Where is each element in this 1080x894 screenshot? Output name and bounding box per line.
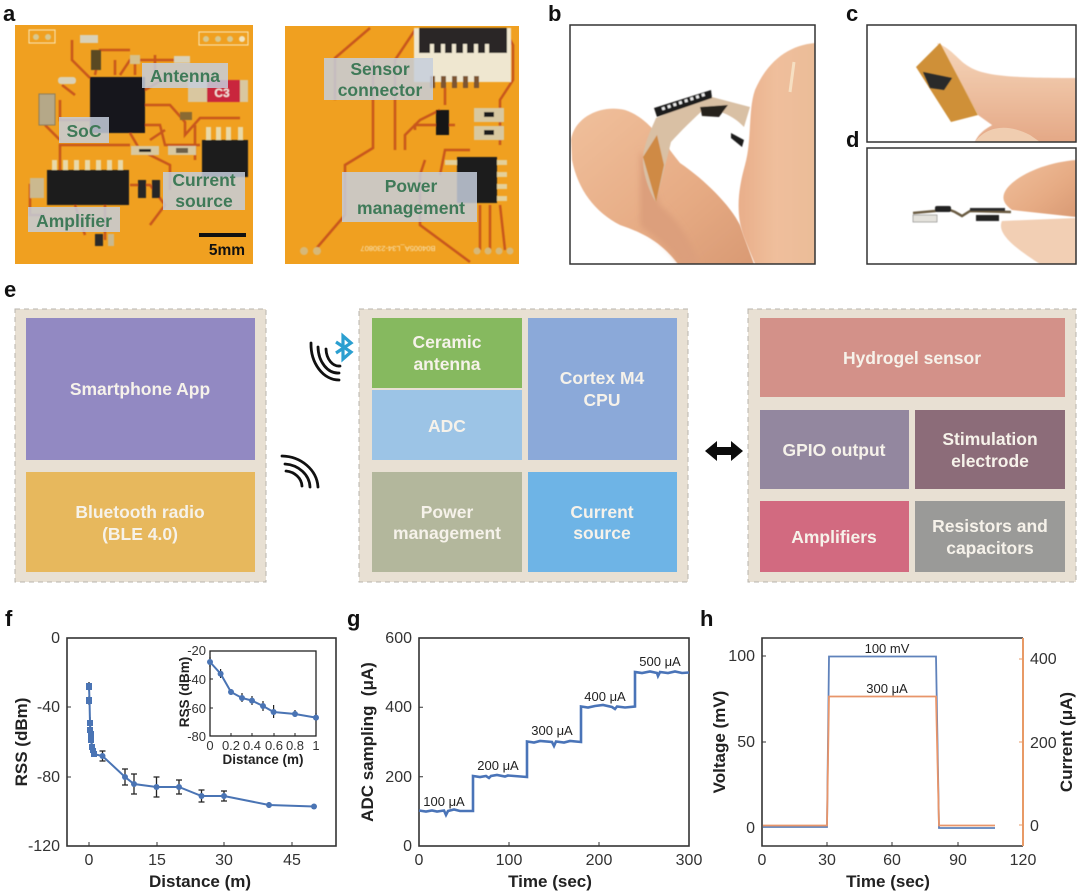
scale bar: 5mm (209, 242, 245, 259)
label: Current source: Current (172, 170, 236, 190)
box: Resistors and capacitors: capacitors (946, 538, 1034, 558)
chart h: voltage and current pulse: Time (sec) (846, 872, 930, 891)
chart h: voltage and current pulse: 120 (1010, 852, 1036, 869)
box: Ceramic antenna (372, 318, 522, 388)
chart h: voltage and current pulse: 50 (737, 734, 755, 751)
panel label h: h (700, 606, 713, 631)
box: GPIO output (760, 410, 909, 489)
label: Amplifier (28, 207, 120, 232)
chart g: ADC sampling steps: 200 (586, 852, 612, 869)
data line (89, 686, 314, 806)
icon: wireless arcs right (311, 343, 340, 380)
box: Amplifiers: Amplifiers (791, 527, 877, 547)
inset chart: RSS 0 to 1 m: 0.8 (286, 738, 304, 753)
chart f: RSS vs distance: 30 (215, 852, 233, 869)
chart g: ADC sampling steps: 0 (403, 838, 412, 855)
label: SoC: SoC (66, 121, 102, 141)
box: Bluetooth radio: Bluetooth radio (75, 502, 205, 522)
box: Current source: source (573, 523, 631, 543)
panel d: side view of circuit between fingers (867, 148, 1076, 264)
box: ADC: ADC (428, 416, 466, 436)
inset chart: RSS 0 to 1 m: Distance (m) (222, 752, 304, 767)
inset chart: RSS 0 to 1 m: -80 (187, 729, 206, 744)
inset chart: RSS 0 to 1 m: 0.4 (243, 738, 261, 753)
box: Resistors and capacitors: Resistors and (932, 516, 1048, 536)
inset chart: RSS 0 to 1 m: 0.2 (222, 738, 240, 753)
panel label d: d (846, 127, 859, 152)
box: Stimulation electrode (915, 410, 1065, 489)
block: sensor side (748, 309, 1076, 582)
chart h: voltage and current pulse: 0 (746, 820, 755, 837)
inset chart: RSS 0 to 1 m: 1 (312, 738, 320, 753)
panel a: circuit board front (15, 25, 253, 264)
label: Antenna (142, 63, 228, 88)
inset chart: RSS 0 to 1 m: -40 (187, 672, 206, 687)
chart h: voltage and current pulse: Voltage (mV) (710, 691, 729, 793)
label: Sensor connector: connector (338, 80, 422, 100)
panel a: circuit board back (285, 26, 519, 264)
chart f: RSS vs distance: 15 (148, 852, 166, 869)
chart f: RSS vs distance: 0 (51, 630, 60, 647)
panel label b: b (548, 1, 561, 26)
label: Current source: source (175, 191, 233, 211)
chart h: voltage and current pulse: 200 (1030, 735, 1057, 752)
error bars (89, 682, 269, 808)
box: Cortex M4 CPU: CPU (584, 390, 620, 410)
chart g: ADC sampling steps: 300 (676, 852, 702, 869)
chart g: ADC sampling steps: 200 (385, 769, 412, 786)
label: Antenna: Antenna (150, 66, 220, 86)
inset chart: RSS 0 to 1 m: -60 (187, 701, 206, 716)
chart g: ADC sampling steps: 400 (385, 699, 412, 716)
chart f: RSS vs distance: -80 (37, 769, 60, 786)
panel b: photo of bent circuit between fingers (570, 25, 815, 264)
box: Bluetooth radio: (BLE 4.0) (102, 524, 178, 544)
chart h: voltage and current pulse: Current (μA) (1057, 692, 1076, 792)
box: Resistors and capacitors (915, 501, 1065, 572)
chart g: ADC sampling steps: 500 μA (639, 654, 681, 669)
chart g: ADC sampling steps: 0 (415, 852, 424, 869)
box: Cortex M4 CPU (528, 318, 677, 460)
box: Amplifiers (760, 501, 909, 572)
chart g: ADC sampling steps: Time (sec) (508, 872, 592, 891)
panel c: photo of circuit on fingertip (867, 25, 1076, 142)
inset chart: RSS 0 to 1 m: -20 (187, 643, 206, 658)
panel label a: a (3, 1, 16, 26)
panel label f: f (5, 606, 13, 631)
chart g: ADC sampling steps: 100 (496, 852, 522, 869)
box: Hydrogel sensor: Hydrogel sensor (843, 348, 981, 368)
box: GPIO output: GPIO output (782, 440, 886, 460)
label: Sensor connector (324, 58, 433, 100)
arrow: bidirectional (705, 441, 743, 461)
box: Smartphone App (26, 318, 255, 460)
voltage trace (763, 656, 995, 828)
box: Ceramic antenna: Ceramic (412, 332, 482, 352)
chart f: RSS vs distance: -40 (37, 699, 60, 716)
scale bar (199, 233, 246, 259)
box: Power management: management (393, 523, 501, 543)
box: Power management: Power (421, 502, 473, 522)
icon: wireless arcs left (282, 456, 318, 487)
chart g: ADC sampling steps: 300 μA (531, 723, 573, 738)
label: SoC (59, 117, 109, 143)
chart g: ADC sampling steps (358, 630, 702, 891)
block: circuit centre (359, 309, 688, 582)
label: Power management: Power (385, 176, 437, 196)
chart f: RSS vs distance: Distance (m) (149, 872, 251, 891)
box: Bluetooth radio (26, 472, 255, 572)
chart h: voltage and current pulse: 300 μA (866, 681, 908, 696)
chart f: RSS vs distance: 45 (283, 852, 301, 869)
chart g: ADC sampling steps: 600 (385, 630, 412, 647)
chart g: ADC sampling steps: ADC sampling (μA) (358, 662, 377, 822)
box: Power management (372, 472, 522, 572)
icon: bluetooth (336, 336, 351, 359)
panel label c: c (846, 1, 858, 26)
panel a: circuit board front: C3 (214, 86, 230, 100)
chart g: ADC sampling steps: 200 μA (477, 758, 519, 773)
block: phone side (15, 309, 266, 582)
chart h: voltage and current pulse: 90 (949, 852, 967, 869)
inset chart: RSS 0 to 1 m (177, 643, 320, 767)
chart h: voltage and current pulse: 30 (818, 852, 836, 869)
chart h: voltage and current pulse: 0 (1030, 818, 1039, 835)
chart h: voltage and current pulse: 400 (1030, 651, 1057, 668)
box: Stimulation electrode: electrode (951, 451, 1029, 471)
label: Power management: management (357, 198, 465, 218)
label: Sensor connector: Sensor (350, 59, 410, 79)
inset chart: RSS 0 to 1 m: 0.6 (265, 738, 283, 753)
box: ADC (372, 390, 522, 460)
panel label g: g (347, 606, 360, 631)
box: Current source: Current (570, 502, 634, 522)
box: Ceramic antenna: antenna (413, 354, 481, 374)
box: Hydrogel sensor (760, 318, 1065, 397)
panel label e: e (4, 277, 16, 302)
chart h: voltage and current pulse: 0 (758, 852, 767, 869)
label: Amplifier: Amplifier (36, 211, 112, 231)
label: Current source (163, 170, 245, 211)
chart h: voltage and current pulse (710, 638, 1076, 891)
chart f: RSS vs distance: 0 (85, 852, 94, 869)
chart h: voltage and current pulse: 100 mV (865, 641, 910, 656)
chart g: ADC sampling steps: 100 μA (423, 794, 465, 809)
chart h: voltage and current pulse: 60 (883, 852, 901, 869)
box: Smartphone App: Smartphone App (70, 379, 210, 399)
chart f: RSS vs distance: RSS (dBm) (12, 698, 31, 786)
chart f: RSS vs distance (12, 630, 336, 891)
chart g: ADC sampling steps: 400 μA (584, 689, 626, 704)
inset chart: RSS 0 to 1 m: 0 (206, 738, 214, 753)
current trace (763, 696, 995, 826)
box: Stimulation electrode: Stimulation (942, 429, 1038, 449)
inset chart: RSS 0 to 1 m: RSS (dBm) (177, 657, 192, 727)
box: Current source (528, 472, 677, 572)
panel a: circuit board back: B04005A_L34-230807 (360, 244, 436, 253)
chart f: RSS vs distance: -120 (28, 838, 60, 855)
chart h: voltage and current pulse: 100 (728, 648, 755, 665)
label: Power management (342, 172, 477, 222)
box: Cortex M4 CPU: Cortex M4 (560, 368, 645, 388)
data trace (419, 672, 689, 815)
